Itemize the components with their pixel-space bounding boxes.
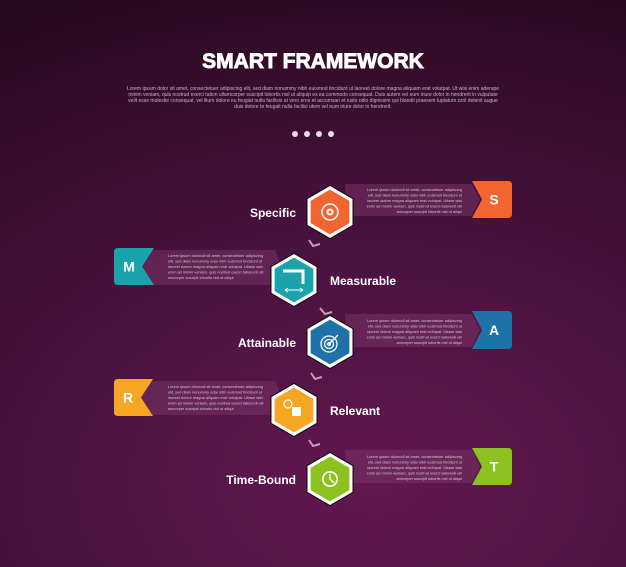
step A: Attainable: laoreet dolore magna aliquam erat volutpat. Utiase wisi	[367, 329, 462, 334]
step R: Relevant: Lorem ipsum dolorodl sit amet, consectetuer adipiscing	[168, 384, 263, 389]
step R: Relevant: enim ad minim veniam, quis nostrud exerci tationodl ulli	[168, 400, 263, 406]
step M: Measurable: Lorem ipsum dolorodl sit amet, consectetuer adipiscing	[168, 253, 263, 258]
step A: Attainable: Lorem ipsum dolorodl sit amet, consectetuer adipiscing	[367, 318, 462, 323]
dots	[292, 131, 334, 137]
step R: Relevant: amcorper suscipit lobortis nisl ut aliqui	[168, 406, 234, 411]
step M: Measurable: M	[123, 258, 135, 274]
step M: Measurable: elit, sed diam nonummy odar nibh euismod tincidunt ut	[168, 258, 263, 264]
step T: Time-Bound: laoreet dolore magna aliquam erat volutpat. Utiase wisi	[367, 465, 462, 470]
step S: Specific: enim ad minim veniam, quis nostrud exerci tationodl ulli	[367, 204, 462, 208]
step S: Specific: Specific	[250, 206, 296, 220]
intro paragraph: Lorem ipsum dolor sit amet, consectetuer adipiscing elit, sed diam nonummy nibh euismod tincidunt ut laoreet dolore magna aliquam erat volutpat. Ut wisi enim aderape	[127, 86, 499, 92]
step A: Attainable	[238, 311, 512, 369]
step T: Time-Bound: Time-Bound	[226, 473, 296, 487]
step M: Measurable: amcorper suscipit lobortis nisl ut aliqui	[168, 275, 234, 280]
step A: Attainable: amcorper suscipit lobortis nisl ut aliqui	[396, 340, 462, 345]
intro paragraph: duis dolore te feugait nulla facilisi utem vel eum iriure dolor in hendrerit.	[234, 104, 392, 110]
connector chevrons	[309, 240, 332, 446]
step S: Specific	[250, 181, 512, 239]
step S: Specific: laoreet dolore magna aliquam erat volutpat. Utiase wisi	[367, 198, 462, 203]
step T: Time-Bound: Lorem ipsum dolorodl sit amet, consectetuer adipiscing	[367, 454, 462, 459]
step A: Attainable: Attainable	[238, 336, 296, 350]
step S: Specific: elit, sed diam nonummy odar nibh euismod tincidunt ut	[368, 192, 463, 198]
intro paragraph: velit esse molestie consequat, vel illum dolore eu feugiat nulla facilisis at vero eros et accumsan et iusto odio dignissim qui blandit praesent luptatum zzril delenit augue	[128, 98, 498, 104]
title: SMART FRAMEWORK	[202, 50, 424, 73]
step S: Specific: S	[489, 192, 499, 208]
intro paragraph: minim veniam, quis nostrud exerci tation ullamcorper suscipit lobortis nisl ut aliquip ex ea commodo consequat. Duis autem vel eum iriure dolor in hendrerit in vulputate	[128, 92, 498, 98]
step R: Relevant: Relevant	[330, 404, 380, 418]
step M: Measurable: enim ad minim veniam, quis nostrud exerci tationodl ulli	[168, 270, 263, 274]
step R: Relevant: laoreet dolore magna aliquam erat volutpat. Utiase wisi	[168, 395, 263, 400]
step T: Time-Bound: elit, sed diam nonummy odar nibh euismod tincidunt ut	[368, 460, 463, 464]
step T: Time-Bound: enim ad minim veniam, quis nostrud exerci tationodl ulli	[367, 470, 462, 476]
step A: Attainable: enim ad minim veniam, quis nostrud exerci tationodl ulli	[367, 334, 462, 340]
step M: Measurable: Measurable	[330, 274, 396, 288]
step S: Specific: amcorper suscipit lobortis nisl ut aliqui	[396, 209, 462, 214]
step S: Specific: Lorem ipsum dolorodl sit amet, consectetuer adipiscing	[367, 187, 462, 192]
step A: Attainable: A	[489, 322, 499, 338]
step T: Time-Bound: T	[490, 458, 499, 474]
step T: Time-Bound: amcorper suscipit lobortis nisl ut aliqui	[396, 476, 462, 481]
intro paragraph	[127, 86, 499, 110]
step R: Relevant: R	[123, 390, 133, 406]
step M: Measurable: laoreet dolore magna aliquam erat volutpat. Utiase wisi	[168, 264, 263, 269]
step R: Relevant	[114, 379, 380, 437]
step M: Measurable	[114, 248, 396, 307]
step R: Relevant: elit, sed diam nonummy odar nibh euismod tincidunt ut	[168, 390, 263, 394]
step T: Time-Bound	[226, 448, 512, 506]
step A: Attainable: elit, sed diam nonummy odar nibh euismod tincidunt ut	[368, 324, 463, 328]
